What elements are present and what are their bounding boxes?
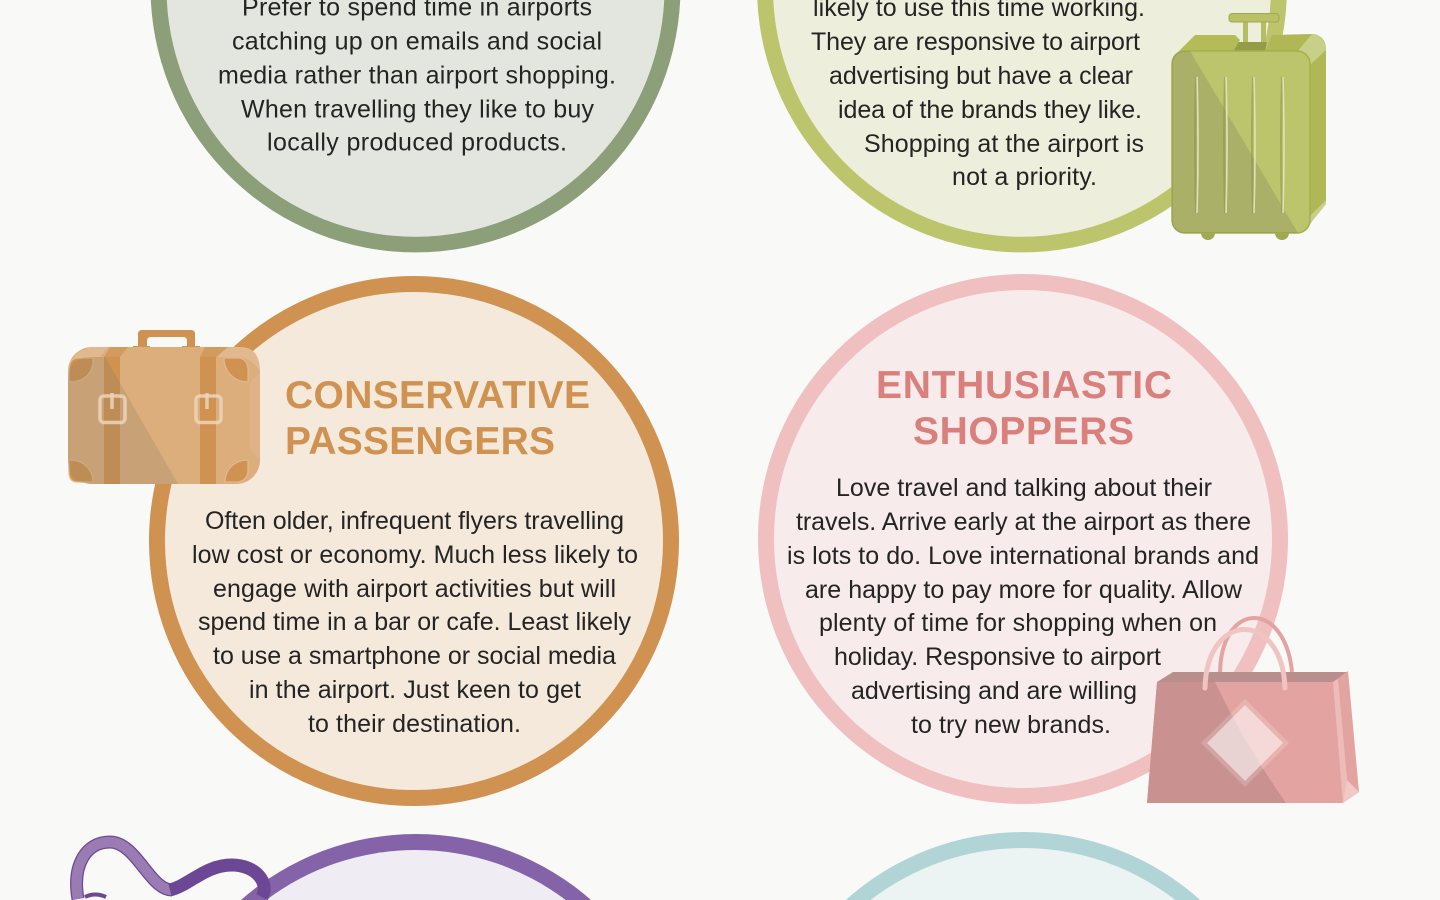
- text: top-right description: Shopping at the airport is: [864, 130, 1144, 158]
- icon: green wheeled suitcase: [1172, 14, 1326, 240]
- text: conservative description: spend time in a bar or cafe. Least likely: [198, 608, 632, 636]
- text: enthusiastic description: is lots to do. Love international brands and: [787, 542, 1259, 570]
- text: enthusiastic description: Love travel and talking about their: [836, 474, 1212, 502]
- text: top-left description: media rather than airport shopping.: [218, 62, 616, 90]
- text: top-left description: [218, 0, 616, 156]
- icon: purple luggage tag strap: [77, 842, 264, 899]
- text: conservative description: to use a smartphone or social media: [213, 642, 616, 670]
- panel: top-left green circle: [151, 0, 680, 252]
- text: top-right description: [811, 0, 1145, 191]
- text: top-right description: They are responsive to airport: [811, 28, 1140, 56]
- text: top-right description: not a priority.: [952, 163, 1097, 191]
- heading: enthusiastic shoppers: SHOPPERS: [913, 410, 1134, 453]
- text: top-left description: catching up on emails and social: [232, 28, 602, 56]
- panel: purple circle: [241, 834, 591, 900]
- text: top-left description: locally produced products.: [267, 128, 567, 156]
- text: conservative description: Often older, infrequent flyers travelling: [205, 507, 624, 535]
- text: conservative description: engage with airport activities but will: [213, 575, 616, 603]
- icon: tan briefcase suitcase: [68, 330, 260, 484]
- text: enthusiastic description: travels. Arrive early at the airport as there: [796, 508, 1251, 536]
- panel: teal circle: [846, 832, 1200, 900]
- heading: conservative passengers: [285, 374, 590, 463]
- heading: enthusiastic shoppers: [876, 364, 1172, 453]
- text: top-right description: idea of the brands they like.: [838, 96, 1142, 124]
- text: conservative description: to their destination.: [308, 710, 521, 738]
- text: enthusiastic description: [787, 474, 1259, 739]
- panel: conservative passengers circle: [157, 284, 671, 798]
- text: enthusiastic description: plenty of time for shopping when on: [819, 609, 1217, 637]
- text: enthusiastic description: to try new brands.: [911, 711, 1111, 739]
- heading: conservative passengers: CONSERVATIVE: [285, 374, 590, 417]
- text: conservative description: in the airport. Just keen to get: [249, 676, 581, 704]
- text: enthusiastic description: are happy to pay more for quality. Allow: [805, 576, 1243, 604]
- text: conservative description: [192, 507, 638, 738]
- heading: conservative passengers: PASSENGERS: [285, 420, 555, 463]
- text: top-right description: advertising but have a clear: [829, 62, 1133, 90]
- panel: top-right lime circle: [757, 0, 1287, 252]
- icon detail: suitcase corner caps: [69, 358, 248, 482]
- icon: pink shopping bag: [1147, 618, 1359, 803]
- text: top-left description: When travelling they like to buy: [241, 96, 594, 124]
- text: enthusiastic description: holiday. Responsive to airport: [834, 643, 1161, 671]
- panel: enthusiastic shoppers circle: [766, 282, 1280, 796]
- text: conservative description: low cost or economy. Much less likely to: [192, 541, 638, 569]
- heading: enthusiastic shoppers: ENTHUSIASTIC: [876, 364, 1172, 407]
- text: enthusiastic description: advertising and are willing: [851, 677, 1137, 705]
